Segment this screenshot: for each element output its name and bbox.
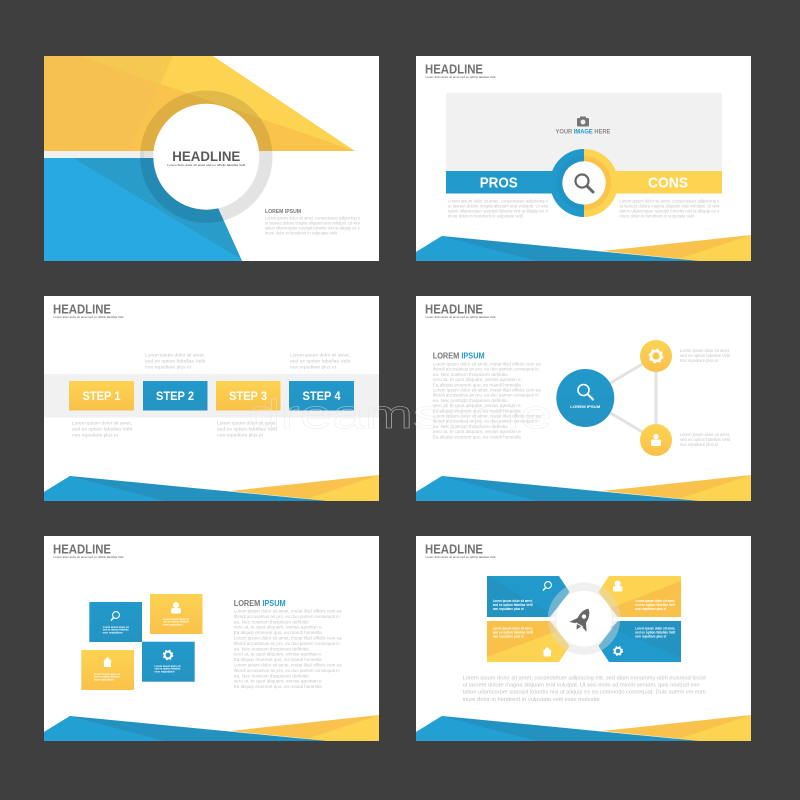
yellow circle: person	[640, 424, 672, 456]
text block: lorem ipsum: Iftendi accusamus an pro, eu duo partem consequat in	[433, 393, 539, 398]
body text: tation ullamcorper suscipit lobortis nisl ut aliquip ex ea commodo consequat. Duis autem vel eum	[463, 690, 706, 696]
heading: HEADLINE	[53, 542, 111, 556]
text block: lorem ipsum: ea. Nec nostrum tharpicem definitio	[433, 424, 508, 429]
card: blue search	[89, 602, 142, 642]
text block: lorem ipsum: Ea aliquip eruerent quo, eu mandi honestla	[433, 408, 521, 413]
text: gear: sed ex option fabellas Velit	[680, 353, 731, 358]
text block: pros: tation ullamcorper suscipit lobortis nisl ut aliquip ex e	[448, 208, 549, 214]
text block: lorem ipsum: Ea aliquip eruerent quo, eu mandi honestla	[234, 630, 322, 635]
text block: lorem ipsum	[433, 351, 541, 439]
step 3	[216, 381, 280, 410]
text block: pros: Lorem ipsum dolor sit amet, consectetuer adipiscing e	[448, 198, 549, 204]
panel: four cards slide	[44, 536, 379, 741]
text block: lorem ipsum: Lorem ipsum dolor sit amet, mutat illud officiis cum ea	[433, 388, 541, 392]
card: yellow person: non repudiare	[163, 622, 184, 626]
heading: HEADLINE	[53, 302, 111, 316]
step 2: STEP 2	[156, 389, 194, 403]
text block: lorem ipsum: Lorem ipsum dolor sit amet, mutat illud officiis cum ea	[234, 608, 342, 614]
text block: pros: ut laoreet dolore magna aliquam erat volutpat. Ut wisi	[448, 204, 548, 208]
text block: lorem ipsum: ut laoreet dolore magna aliquam erat volutpat. Ut wisi	[265, 220, 360, 226]
text: step 2: Lorem ipsum dolor sit amet,	[145, 352, 205, 358]
step 4: STEP 4	[302, 389, 341, 403]
image placeholder	[446, 93, 722, 171]
strip: pale divider	[44, 151, 144, 158]
white headline circle	[153, 104, 259, 210]
bottom decoration	[416, 715, 751, 741]
text block: lorem ipsum: Ea aliquip eruerent quo, eu mandi honestla	[234, 684, 322, 689]
cons label: CONS	[648, 174, 688, 192]
text block: lorem ipsum: vero at, te quot aliquam, veniss apeirian e	[433, 377, 521, 382]
text: person	[680, 432, 731, 447]
text block: lorem ipsum: ea. Nec nostrum tharpicem definitio	[433, 372, 508, 377]
icon: home	[543, 647, 552, 656]
watermark: dreamstime	[248, 393, 552, 437]
card: top left	[487, 576, 570, 617]
body text: iriure dolor in hendrerit in vulputate velit esse molestie	[463, 697, 600, 703]
card: yellow person	[150, 594, 202, 634]
card text: top right: non repudiare plus et	[635, 607, 667, 611]
text block: lorem ipsum: Lorem ipsum dolor sit amet, consectetuer adipiscing e	[265, 216, 360, 220]
text: gear	[680, 348, 731, 363]
text: gear: non repudiare plus et	[680, 358, 719, 363]
card: blue search: non repudiare	[103, 630, 123, 634]
step 4	[289, 381, 354, 410]
text: person: Lorem ipsum dolor sit amet,	[680, 432, 730, 437]
text: gear: Lorem ipsum dolor sit amet,	[680, 348, 730, 353]
text: step 4	[290, 352, 351, 370]
text block: cons	[620, 198, 720, 218]
text block: lorem ipsum: Iftendi accusamus an pro, eu duo partem consequat in	[234, 614, 340, 619]
bottom decoration	[44, 475, 379, 501]
step 3: STEP 3	[229, 389, 267, 403]
text block: lorem ipsum	[265, 209, 361, 236]
text block: lorem ipsum: vero at, te quot aliquam, veniss apeirian e	[234, 652, 322, 657]
card text: bottom right	[635, 627, 676, 639]
text: step 1: sed ex option fabellas Velit	[72, 426, 133, 432]
text block: lorem ipsum: ea. Nec nostrum tharpicem definitio	[234, 619, 309, 624]
text: step 3: Lorem ipsum dolor sit amet,	[217, 420, 277, 426]
text block: cons: ut laoreet dolore magna aliquam erat volutpat. Ut wisi	[620, 204, 720, 208]
subheading: Lorem illum dolor sit amet sed ex officiis fabellas Velit	[426, 75, 496, 79]
text: person: sed ex option fabellas Velit	[680, 437, 731, 442]
text: step 1: non repudiare plus et	[72, 432, 119, 438]
pros label: PROS	[480, 174, 518, 192]
text block: lorem ipsum: ea. Nec nostrum tharpicem definitio	[234, 673, 309, 678]
subheading: Lorem illum dolor sit amet sed ex officiis fabellas Velit	[54, 315, 124, 319]
heading: HEADLINE	[425, 542, 483, 556]
ring	[552, 587, 616, 651]
card: yellow person: sed ex option fabellas	[163, 620, 189, 624]
text block: pros: iriure dolor in hendrerit in vulputate velit	[448, 214, 524, 218]
card: yellow person: Lorem ipsum dolor sit	[163, 617, 189, 621]
card: blue gear: Lorem ipsum dolor sit	[154, 664, 181, 668]
icon: magnifier	[576, 174, 593, 192]
body text: Lorem ipsum dolor sit amet, consectetuer adipiscing elit, sed diam nonummy nibh euismod tincid	[463, 675, 706, 681]
text: step 3	[217, 420, 278, 438]
text block: lorem ipsum: Lorem ipsum dolor sit amet, mutat illud officiis cum ea	[433, 414, 541, 418]
card text: top left: sed ex option fabellas Velit	[493, 603, 534, 607]
card text: top left	[493, 599, 534, 611]
text block: lorem ipsum: vero at, te quot aliquam, veniss apeirian e	[433, 403, 521, 408]
card text: bottom left	[493, 627, 534, 639]
text: step 2	[145, 352, 206, 370]
panel: pros and cons slide	[416, 56, 751, 261]
text block: lorem ipsum: ea. Nec nostrum tharpicem definitio	[234, 646, 309, 651]
connector lines	[585, 356, 656, 440]
blue hub circle: LOREM IPSUM	[570, 404, 601, 409]
text: step 4: Lorem ipsum dolor sit amet,	[290, 352, 350, 358]
text block: cons: iriure dolor in hendrerit in vulputate velit	[620, 214, 695, 218]
card: yellow home	[81, 650, 134, 690]
card: blue search: Lorem ipsum dolor sit	[103, 625, 129, 629]
white center circle	[556, 591, 612, 646]
gray band	[44, 374, 379, 418]
panel: rocket diagram slide	[416, 536, 751, 741]
ring around headline	[147, 97, 266, 216]
icon: gear	[614, 647, 622, 655]
panel: steps slide	[44, 296, 379, 501]
card: yellow home: Lorem ipsum dolor sit	[94, 672, 120, 676]
text: person: non repudiare plus et	[680, 442, 719, 447]
step 1: STEP 1	[82, 389, 121, 403]
text block: lorem ipsum: vero at, te quot aliquam, veniss apeirian e	[234, 625, 322, 630]
text block: lorem ipsum: Ea aliquip eruerent quo, eu mandi honestla	[433, 434, 521, 439]
card text: top right: sed ex option fabellas Velit	[635, 603, 676, 607]
step 2	[143, 381, 208, 410]
card text: bottom left: Lorem ipsum dolor sit amet,	[493, 627, 533, 631]
card: blue gear: sed ex option fabellas	[154, 667, 181, 671]
text block: lorem ipsum: Iftendi accusamus an pro, eu duo partem consequat in	[433, 419, 539, 424]
pros bar	[446, 171, 556, 194]
image caption: YOUR IMAGE HERE	[556, 130, 610, 136]
text block: lorem ipsum: vero at, te quot aliquam, veniss apeirian e	[234, 679, 322, 684]
text: step 3: non repudiare plus et	[217, 432, 264, 438]
text block: lorem ipsum: LOREM IPSUM	[433, 351, 485, 360]
subheading: Lorem illum dolor sit amet sed ex officiis fabellas Velit	[426, 555, 496, 559]
card text: top left: Lorem ipsum dolor sit amet,	[493, 599, 533, 603]
text block: lorem ipsum: Ea aliquip eruerent quo, eu mandi honestla	[433, 382, 521, 387]
text block: cons: Lorem ipsum dolor sit amet, consectetuer adipiscing e	[620, 198, 720, 204]
text: step 1: Lorem ipsum dolor sit amet,	[72, 420, 132, 426]
card text: bottom right: non repudiare plus et	[635, 635, 667, 639]
card text: bottom left: non repudiare plus et	[493, 635, 525, 639]
text block: lorem ipsum: iriure dolor in hendrerit in vulputate velit	[265, 230, 338, 236]
heading: HEADLINE	[425, 62, 483, 76]
icon: rocket	[568, 604, 597, 635]
shape: yellow arrow	[44, 56, 355, 151]
panel: title slide	[44, 56, 379, 261]
text block: cons: tation ullamcorper suscipit lobortis nisl ut aliquip ex e	[620, 208, 720, 214]
body text	[463, 675, 706, 703]
card text: top right: Lorem ipsum dolor sit amet,	[635, 599, 675, 603]
text block: lorem ipsum: Iftendi accusamus an pro, eu duo partem consequat in	[234, 641, 340, 646]
text block: lorem ipsum: vero at, te quot aliquam, veniss apeirian e	[433, 429, 521, 434]
bottom decoration	[416, 475, 751, 501]
card text: bottom left: sed ex option fabellas Velit	[493, 631, 534, 635]
text: step 3: sed ex option fabellas Velit	[217, 426, 278, 432]
text block: lorem ipsum: LOREM IPSUM	[234, 599, 286, 608]
text block: lorem ipsum: Iftendi accusamus an pro, eu duo partem consequat in	[433, 367, 539, 372]
text block: lorem ipsum: Lorem ipsum dolor sit amet, mutat illud officiis cum ea	[234, 662, 342, 668]
card: bottom right	[598, 621, 681, 662]
card text: bottom right: Lorem ipsum dolor sit amet,	[635, 627, 675, 631]
card text: top right	[635, 599, 676, 611]
card text: bottom right: sed ex option fabellas Velit	[635, 631, 676, 635]
text block: pros	[448, 198, 549, 218]
subheading: Lorem illum dolor sit amet sed ex officiis fabellas Velit	[167, 163, 246, 167]
blue hub circle	[556, 369, 614, 427]
yellow circle: gear	[640, 340, 672, 372]
body text: ut laoreet dolore magna aliquam erat volutpat. Ut wisi enim ad minim veniam, quis nostrud exe	[463, 682, 700, 688]
text block: lorem ipsum: tation ullamcorper suscipit lobortis nisl ut aliquip ex e	[265, 226, 361, 230]
heading: HEADLINE	[172, 148, 240, 164]
card: blue search: sed ex option fabellas	[103, 628, 129, 632]
cons bar	[612, 171, 722, 194]
text block: lorem ipsum: ea. Nec nostrum tharpicem definitio	[433, 398, 508, 403]
text block: lorem ipsum: LOREM IPSUM	[265, 209, 301, 215]
text: step 1	[72, 420, 133, 438]
card: yellow home: non repudiare	[94, 677, 115, 681]
step 1	[69, 381, 134, 410]
text block: lorem ipsum: Lorem ipsum dolor sit amet, mutat illud officiis cum ea	[234, 636, 342, 640]
text: step 2: non repudiare plus et	[145, 364, 192, 370]
card text: top left: non repudiare plus et	[493, 607, 525, 611]
icon: person	[613, 580, 622, 592]
card: top right	[598, 576, 681, 617]
heading: HEADLINE	[425, 302, 483, 316]
text block: lorem ipsum	[234, 599, 342, 689]
bottom decoration	[44, 715, 379, 741]
text: step 2: sed ex option fabellas Velit	[145, 358, 206, 364]
gaps between cards	[540, 617, 628, 621]
card: bottom left	[487, 621, 570, 662]
card: blue gear	[142, 642, 195, 682]
shape: blue block	[44, 158, 242, 261]
subheading: Lorem illum dolor sit amet sed ex officiis fabellas Velit	[54, 555, 124, 559]
panel: network diagram slide	[416, 296, 751, 501]
icon: search	[543, 582, 551, 590]
text: step 4: non repudiare plus et	[290, 364, 337, 370]
subheading: Lorem illum dolor sit amet sed ex officiis fabellas Velit	[426, 315, 496, 319]
icon: camera	[577, 116, 589, 126]
bottom decoration	[416, 235, 751, 261]
card: blue gear: non repudiare	[154, 669, 175, 673]
text block: lorem ipsum: Iftendi accusamus an pro, eu duo partem consequat in	[234, 668, 340, 673]
text block: lorem ipsum: Ea aliquip eruerent quo, eu mandi honestla	[234, 657, 322, 662]
card: yellow home: sed ex option fabellas	[94, 675, 120, 679]
central split circle	[550, 149, 618, 217]
text: step 4: sed ex option fabellas Velit	[290, 358, 351, 364]
text block: lorem ipsum: Lorem ipsum dolor sit amet, mutat illud officiis cum ea	[433, 362, 541, 366]
